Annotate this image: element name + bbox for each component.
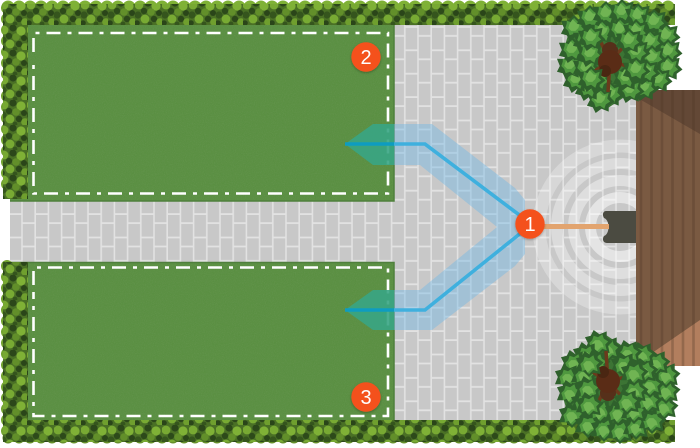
- marker 2: 2: [360, 47, 372, 69]
- hose: [535, 224, 609, 229]
- zone outline: lower lawn: [34, 268, 388, 416]
- marker 1: [515, 209, 545, 239]
- marker 2: [351, 42, 381, 72]
- marker 3: [351, 382, 381, 412]
- marker 1: 1: [524, 214, 536, 236]
- panel: upper lawn: [10, 18, 394, 201]
- blue water lines: [345, 144, 522, 310]
- water rings around pipe: [534, 140, 636, 314]
- roof light hip: [652, 320, 700, 366]
- panel: lower lawn: [10, 262, 394, 422]
- house roof: [636, 90, 700, 366]
- tree: bottom right: [555, 330, 680, 444]
- hedge: upper left: [3, 4, 28, 199]
- spray tip: lower lawn: [345, 290, 394, 330]
- zone outline: upper lawn: [34, 33, 388, 194]
- hedge: top: [3, 4, 675, 25]
- spray band on pavement: [394, 124, 525, 330]
- hedge: lower left: [3, 262, 28, 442]
- spray tip: upper lawn: [345, 124, 394, 165]
- hedge: bottom: [3, 420, 675, 442]
- roof dark hip: [636, 90, 700, 134]
- marker 3: 3: [360, 387, 372, 409]
- tree: top right: [557, 0, 682, 113]
- pipe: [603, 211, 637, 243]
